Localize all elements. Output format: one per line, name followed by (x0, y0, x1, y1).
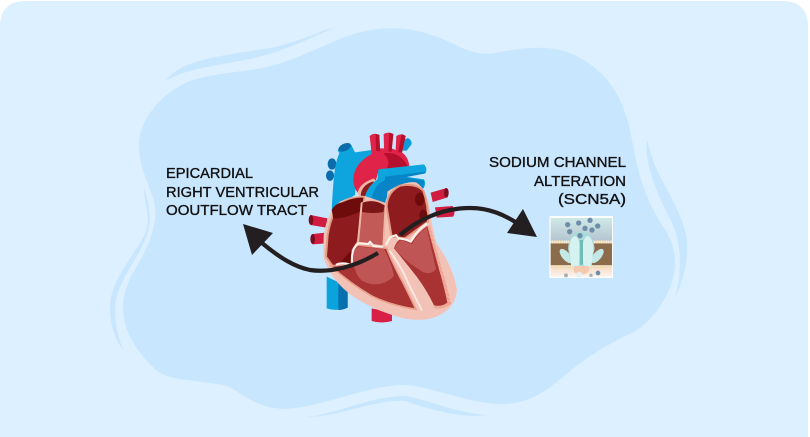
arrow: to sodium channel (400, 208, 537, 237)
central blob (123, 28, 675, 409)
vessels behind the heart (309, 133, 455, 322)
pulmonary vein openings (415, 193, 427, 220)
arrow: to epicardial RVOT (243, 224, 378, 271)
label: epicardial right ventricular outflow tract: RIGHT VENTRICULAR (166, 185, 319, 201)
aortic arch (353, 133, 409, 194)
left ventricle (394, 226, 447, 306)
decorative swoosh: left (110, 188, 150, 351)
label: epicardial right ventricular outflow tract: OOUTFLOW TRACT (166, 203, 307, 219)
left ventricle inner (395, 227, 436, 273)
label: epicardial right ventricular outflow tract (166, 166, 319, 219)
pulmonary trunk interior (362, 201, 385, 213)
septum highlight (389, 251, 422, 311)
right atrium (326, 197, 364, 266)
membrane (551, 243, 612, 265)
label: sodium channel alteration: ALTERATION (534, 174, 626, 190)
valves (336, 223, 427, 265)
image frame (549, 216, 613, 278)
ventricular wall fibres (429, 226, 449, 307)
extracellular space (551, 218, 612, 241)
left atrium (387, 185, 428, 238)
intracellular space (551, 267, 612, 277)
membrane heads (551, 242, 612, 267)
aortic arch shadow (376, 133, 409, 171)
label: sodium channel alteration (489, 155, 626, 208)
sodium ions (565, 218, 600, 275)
right ventricle inner (353, 247, 394, 284)
decorative swoosh: right (647, 140, 687, 298)
pulmonary artery (364, 164, 426, 203)
label: sodium channel alteration: (SCN5A) (558, 192, 626, 208)
heart illustration (309, 133, 457, 322)
pulmonary trunk (358, 201, 386, 247)
sodium channel illustration (549, 216, 613, 278)
lower ions (564, 272, 593, 278)
atrium shadow (332, 198, 363, 219)
decorative swoosh: top left (166, 26, 338, 81)
right ventricle (331, 245, 416, 309)
decorative swoosh: bottom (305, 396, 488, 417)
label: sodium channel alteration: SODIUM CHANNEL (489, 155, 626, 171)
channel protein (557, 231, 606, 275)
label: epicardial right ventricular outflow tract: EPICARDIAL (166, 166, 253, 182)
heart wall (323, 182, 457, 320)
